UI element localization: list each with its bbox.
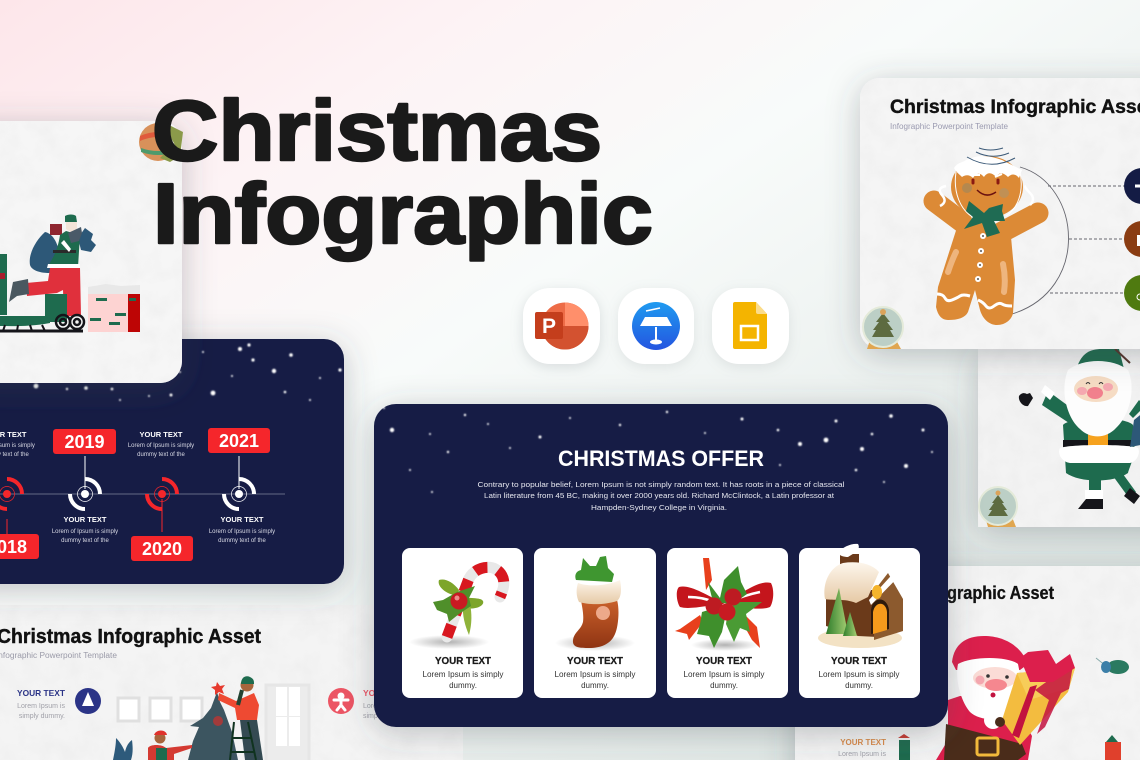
icon: candy cane (409, 567, 504, 649)
icon: mitten (1096, 658, 1129, 674)
wall frames (118, 698, 202, 721)
year badge 2020: 2020 (142, 539, 182, 559)
panel: santa wave slide (978, 349, 1140, 527)
snow (383, 407, 933, 493)
panel: sleigh slide (0, 121, 182, 383)
label: your text: YOUR TEXT (840, 738, 886, 747)
year badge 2021 (208, 428, 270, 453)
icon: snow globe (863, 307, 903, 349)
card: holly bow (667, 548, 788, 698)
icon: star badge (1124, 168, 1140, 204)
panel: bottom-left tree slide (0, 605, 463, 760)
window (266, 685, 309, 760)
panel: santa gift slide (795, 566, 1140, 760)
label: your text (838, 738, 886, 758)
node 2018 (0, 479, 22, 534)
icon: striped gift (898, 734, 910, 760)
text: top left (0, 430, 35, 458)
icon: google slides (712, 288, 789, 364)
icon: holly bow (675, 558, 773, 651)
card: stocking (534, 548, 656, 698)
node 2021 (224, 456, 254, 509)
title: Infographic (153, 167, 653, 262)
slide subtitle: Infographic Powerpoint Template (890, 122, 1009, 131)
year badge 2018 (0, 534, 39, 559)
paragraph (478, 480, 845, 512)
panel: timeline slide (0, 339, 344, 584)
text: top middle (128, 430, 194, 458)
card text (422, 670, 504, 690)
card text (554, 670, 636, 690)
icon: tree badge (75, 688, 101, 714)
card text (818, 670, 900, 690)
text: bottom right: YOUR TEXT (221, 515, 264, 524)
card text: Lorem Ipsum is simply (818, 670, 900, 679)
icon: powerpoint: P (542, 315, 556, 338)
illustration: decorating tree (113, 676, 263, 760)
card text (684, 670, 764, 690)
label: your text right: Lorem Ipsum is (363, 703, 411, 710)
snow (34, 343, 342, 401)
card text: dummy. (845, 681, 873, 690)
label: your text: Lorem Ipsum is (838, 751, 886, 758)
icon: red gift (1105, 735, 1121, 760)
card heading: YOUR TEXT (831, 656, 887, 667)
card text: Lorem Ipsum is simply (422, 670, 504, 679)
text: bottom left (52, 515, 118, 544)
illustration: brick chimney (88, 284, 140, 332)
card heading: YOUR TEXT (696, 656, 752, 667)
text: bottom left: dummy text of the (61, 538, 110, 544)
text: top middle: Lorem of Ipsum is simply (128, 443, 194, 449)
icon: gingerbread house (818, 544, 903, 648)
year badge 2020 (131, 536, 193, 561)
label: your text left: simply dummy. (19, 713, 65, 720)
slide title: Christmas Infographic Asset (0, 626, 261, 648)
year badge 2021: 2021 (219, 431, 259, 451)
node 2019 (70, 456, 100, 509)
panel: christmas offer (374, 404, 948, 727)
title: Christmas (152, 84, 602, 179)
panel: gingerbread slide (860, 78, 1140, 349)
icon: ornament (139, 123, 183, 162)
paragraph: Hampden-Sydney College in Virginia. (591, 503, 727, 512)
icon: powerpoint (523, 288, 600, 364)
card text: Lorem Ipsum is simply (684, 670, 764, 679)
icon: stocking (555, 556, 635, 651)
text: bottom left: YOUR TEXT (64, 515, 107, 524)
card text: dummy. (710, 681, 738, 690)
illustration: waving santa (1019, 349, 1140, 509)
card: candy cane (402, 548, 523, 698)
icon: gingerbread badge (328, 688, 354, 714)
label: your text right (363, 688, 412, 720)
illustration: santa on sleigh (0, 214, 96, 331)
label: your text left: YOUR TEXT (17, 688, 66, 698)
card text: dummy. (449, 681, 477, 690)
title (152, 84, 653, 262)
paragraph: Latin literature from 45 BC, making it over 2000 years old. Richard McClintock, a Latin professor at (484, 491, 835, 500)
text: bottom left: Lorem of Ipsum is simply (52, 529, 118, 535)
text: bottom right (209, 515, 275, 544)
year badge 2019 (53, 429, 116, 454)
card text: Lorem Ipsum is simply (554, 670, 636, 679)
label: your text right: simply dummy. (363, 713, 409, 720)
icon: bell badge (1124, 275, 1140, 311)
node 2020 (147, 479, 177, 532)
heading: CHRISTMAS OFFER (558, 446, 764, 471)
illustration: gingerbread man (934, 148, 1038, 325)
connector arc and dashes (1012, 167, 1125, 314)
paragraph: Contrary to popular belief, Lorem Ipsum is not simply random text. It has roots in a piece of classical (478, 480, 845, 489)
label: your text right: YOUR TEXT (363, 688, 412, 698)
card: house (799, 544, 920, 698)
illustration: santa with gift (936, 636, 1075, 760)
label: your text left (17, 688, 66, 720)
label: your text left: Lorem Ipsum is (17, 703, 65, 710)
text: top middle: YOUR TEXT (140, 430, 183, 439)
icon: keynote (618, 288, 694, 364)
text: top middle: dummy text of the (137, 452, 186, 458)
card text: dummy. (581, 681, 609, 690)
icon: snow globe (979, 487, 1017, 527)
text: bottom right: Lorem of Ipsum is simply (209, 529, 275, 535)
card heading: YOUR TEXT (435, 656, 491, 667)
timeline axis (0, 493, 285, 495)
icon: gift badge (1124, 221, 1140, 257)
card heading: YOUR TEXT (567, 656, 623, 667)
slide title: graphic Asset (947, 583, 1054, 603)
text: bottom right: dummy text of the (218, 538, 267, 544)
year badge 2019: 2019 (64, 432, 105, 452)
